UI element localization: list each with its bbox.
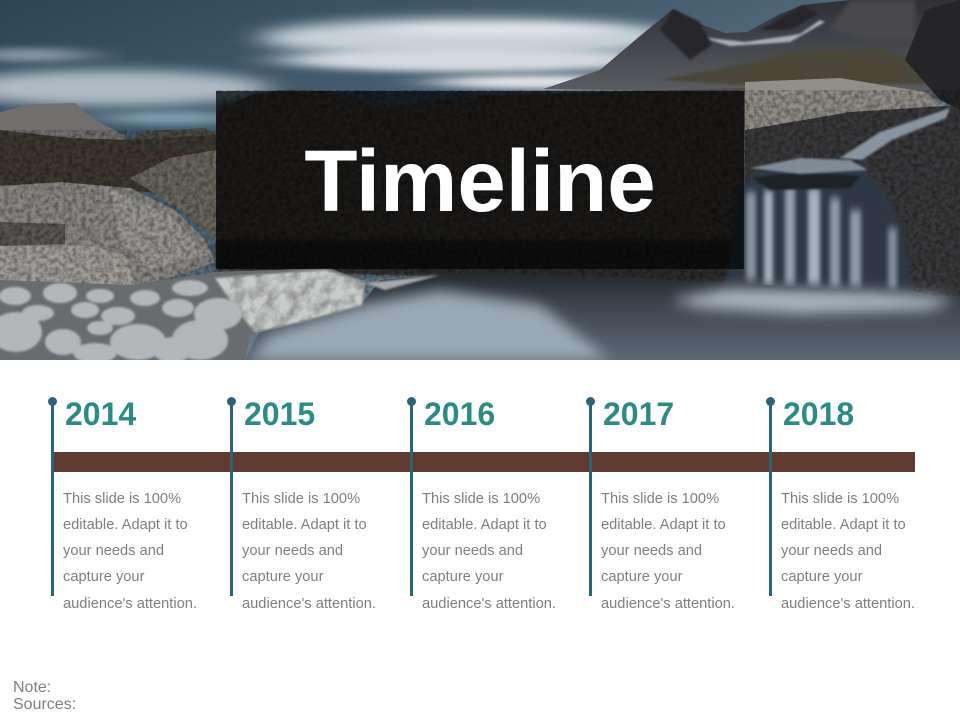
waterfall [725,158,912,295]
milestone: 2014: This slide is 100% [63,490,181,506]
note and sources [13,679,76,713]
milestone: 2016: 2016 [424,396,495,432]
milestone: 2015: This slide is 100% [242,490,360,506]
clouds [0,18,680,125]
milestone: 2018: capture your [781,569,862,585]
timeline bar [53,452,915,472]
large left boulder [0,182,215,285]
milestone: 2017: This slide is 100% [601,490,719,506]
photo texture [0,90,960,300]
milestone: 2015: capture your [242,569,323,585]
milestone: 2017: your needs and [601,543,702,559]
milestone: 2015 [227,396,376,612]
milestone: 2018: editable. Adapt it to [781,517,906,533]
milestone: 2017: 2017 [603,396,674,432]
distant right peaks [543,0,960,100]
water [245,272,960,360]
milestone: 2014: capture your [63,569,144,585]
milestone: 2017: editable. Adapt it to [601,517,726,533]
milestone: 2017: capture your [601,569,682,585]
milestone: 2016: audience's attention. [422,596,556,612]
milestone: 2016: This slide is 100% [422,490,540,506]
milestone: 2015: your needs and [242,543,343,559]
title: Timeline [304,133,656,230]
photo: mountain river and waterfall [0,0,960,360]
milestone: 2016: your needs and [422,543,523,559]
note and sources: Note: [13,679,51,696]
note and sources: Sources: [13,696,76,713]
milestone: 2014: audience's attention. [63,596,197,612]
milestone: 2018: This slide is 100% [781,490,899,506]
milestone: 2014: editable. Adapt it to [63,517,188,533]
milestone: 2015: audience's attention. [242,596,376,612]
milestone: 2015: 2015 [244,396,315,432]
milestone: 2017: audience's attention. [601,596,735,612]
milestone: 2018: 2018 [783,396,854,432]
milestone: 2017 [586,396,735,612]
milestone: 2018 [766,396,915,612]
milestone: 2014: 2014 [65,396,136,432]
milestone: 2014 [48,396,197,612]
milestone: 2016: capture your [422,569,503,585]
milestone: 2015: editable. Adapt it to [242,517,367,533]
dark rocky slope behind band and right [216,88,960,300]
milestone: 2018: your needs and [781,543,882,559]
milestone: 2014: your needs and [63,543,164,559]
milestone: 2018: audience's attention. [781,596,915,612]
stream [840,108,950,160]
pebbles and white rocks [0,265,440,363]
title band [216,91,744,269]
milestone: 2016 [407,396,556,612]
milestone: 2016: editable. Adapt it to [422,517,547,533]
distant left hill [0,103,216,240]
